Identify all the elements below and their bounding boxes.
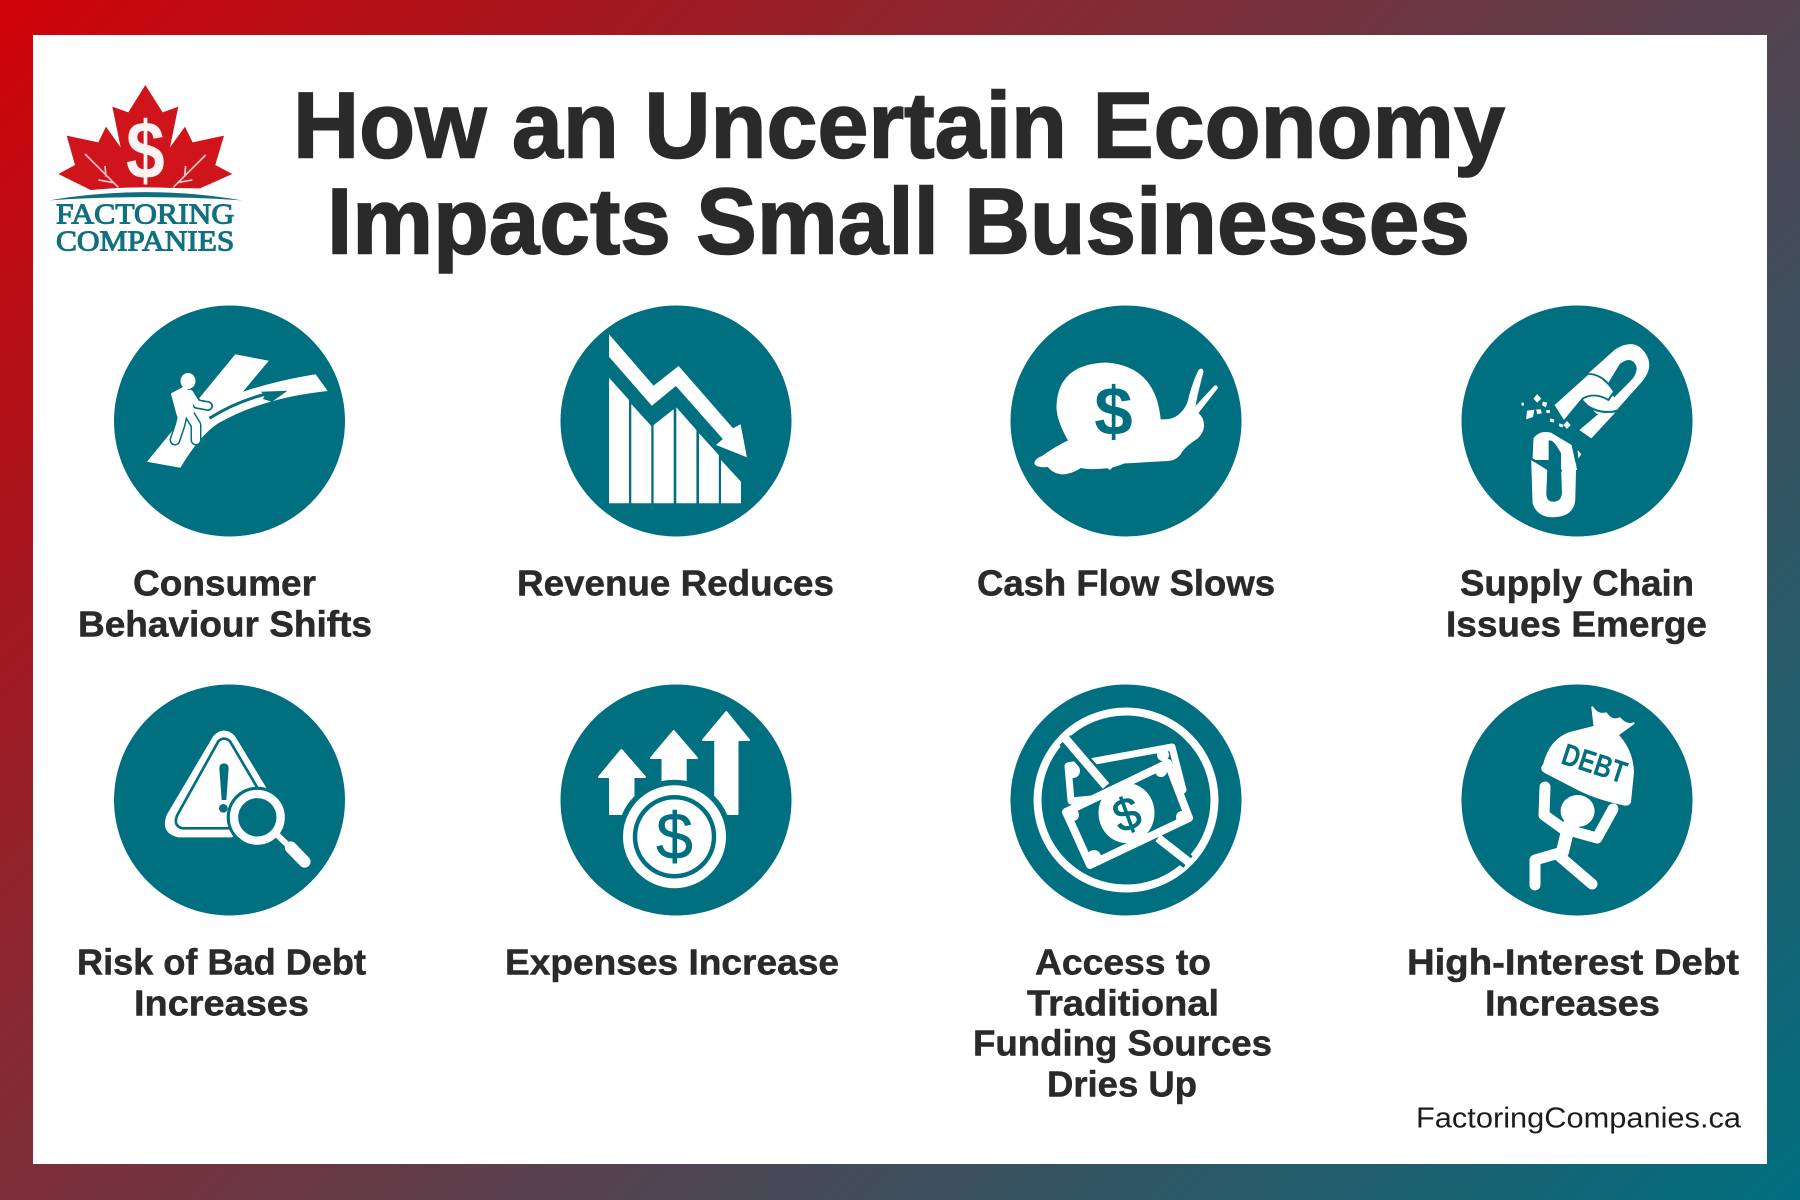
icon: consumer behaviour shifts — [114, 306, 345, 536]
prohibition slash — [1065, 740, 1188, 862]
swoosh — [49, 192, 242, 200]
prohibition ring — [1038, 712, 1214, 888]
icon: high interest debt — [1462, 684, 1692, 916]
label: Risk of Bad Debt Increases — [77, 941, 366, 1023]
icon: no access to funding — [1010, 684, 1242, 916]
dollar sign: $ — [126, 105, 165, 196]
title line 1: How an Uncertain Economy — [293, 73, 1505, 178]
broken middle link lower stroke — [1579, 413, 1615, 438]
label: Access to Traditional Funding Sources Dries Up: Traditional — [1027, 982, 1219, 1023]
label: High-Interest Debt Increases — [1407, 941, 1739, 1023]
front banknote — [1066, 763, 1189, 865]
chain fragments — [1522, 394, 1581, 459]
icon: risk warning magnifier — [114, 684, 345, 916]
snail body — [1034, 369, 1218, 474]
broken middle link upper stroke — [1553, 374, 1614, 422]
arrow on road — [209, 394, 266, 418]
front note corners — [1067, 765, 1188, 864]
falling arrow — [609, 334, 747, 457]
icon: expenses increase: $ — [656, 799, 693, 873]
descending bars — [609, 378, 741, 503]
label: High-Interest Debt Increases: High-Interest Debt — [1407, 941, 1739, 982]
label: High-Interest Debt Increases: Increases — [1485, 982, 1660, 1023]
icon: expenses increase — [560, 684, 792, 916]
label: Consumer Behaviour Shifts: Behaviour Shifts — [78, 604, 372, 645]
label: Access to Traditional Funding Sources Dries Up — [973, 941, 1272, 1104]
icon: revenue reduces — [560, 306, 792, 536]
title line 2: Impacts Small Businesses — [327, 168, 1470, 273]
label: Cash Flow Slows: Cash Flow Slows — [977, 563, 1275, 604]
debt money bag — [1542, 707, 1634, 805]
icon: cash flow slows snail — [1010, 306, 1242, 536]
intact top link — [1583, 344, 1649, 414]
stick figure — [1535, 787, 1613, 885]
label: Supply Chain Issues Emerge: Supply Chain — [1460, 563, 1694, 604]
three rising arrows — [599, 712, 749, 814]
label: Access to Traditional Funding Sources Dries Up: Funding Sources — [973, 1022, 1272, 1064]
website url: FactoringCompanies.ca — [1416, 1102, 1742, 1134]
dollar coin — [618, 780, 732, 894]
label: Supply Chain Issues Emerge: Issues Emerge — [1446, 604, 1707, 645]
label: Risk of Bad Debt Increases: Increases — [134, 982, 309, 1023]
label: Revenue Reduces: Revenue Reduces — [517, 563, 834, 604]
icon: broken supply chain — [1462, 306, 1692, 536]
walking person — [172, 373, 208, 440]
icon: maple leaf — [58, 85, 232, 190]
dollar on shell: $ — [1094, 373, 1133, 450]
label: Access to Traditional Funding Sources Dries Up: Access to — [1035, 941, 1211, 982]
note centre coin — [1098, 783, 1154, 843]
back note corners — [1066, 749, 1169, 778]
lower broken link — [1533, 432, 1577, 470]
road forking — [147, 354, 328, 468]
leaf veins — [85, 154, 206, 187]
snail shell — [1056, 362, 1161, 470]
link separator — [1581, 401, 1617, 412]
logo text: Factoring: FACTORING — [56, 199, 234, 230]
label: Expenses Increase: Expenses Increase — [505, 941, 839, 982]
label: Access to Traditional Funding Sources Dries Up: Dries Up — [1047, 1064, 1197, 1104]
icon: no access to funding: $ — [1106, 785, 1148, 843]
warning triangle — [165, 730, 267, 837]
logo: Factoring Companies — [49, 85, 242, 258]
label: Consumer Behaviour Shifts: Consumer — [133, 563, 316, 604]
label: Risk of Bad Debt Increases: Risk of Bad Debt — [77, 941, 366, 982]
lower intact link — [1531, 460, 1576, 517]
label: Consumer Behaviour Shifts — [78, 563, 372, 645]
magnifying glass — [227, 787, 288, 848]
back banknote — [1068, 747, 1183, 801]
label: Supply Chain Issues Emerge — [1446, 563, 1707, 645]
title — [293, 73, 1505, 273]
exclamation mark — [219, 763, 229, 800]
debt text: DEBT — [1558, 737, 1631, 790]
logo text: Companies: COMPANIES — [56, 227, 234, 258]
